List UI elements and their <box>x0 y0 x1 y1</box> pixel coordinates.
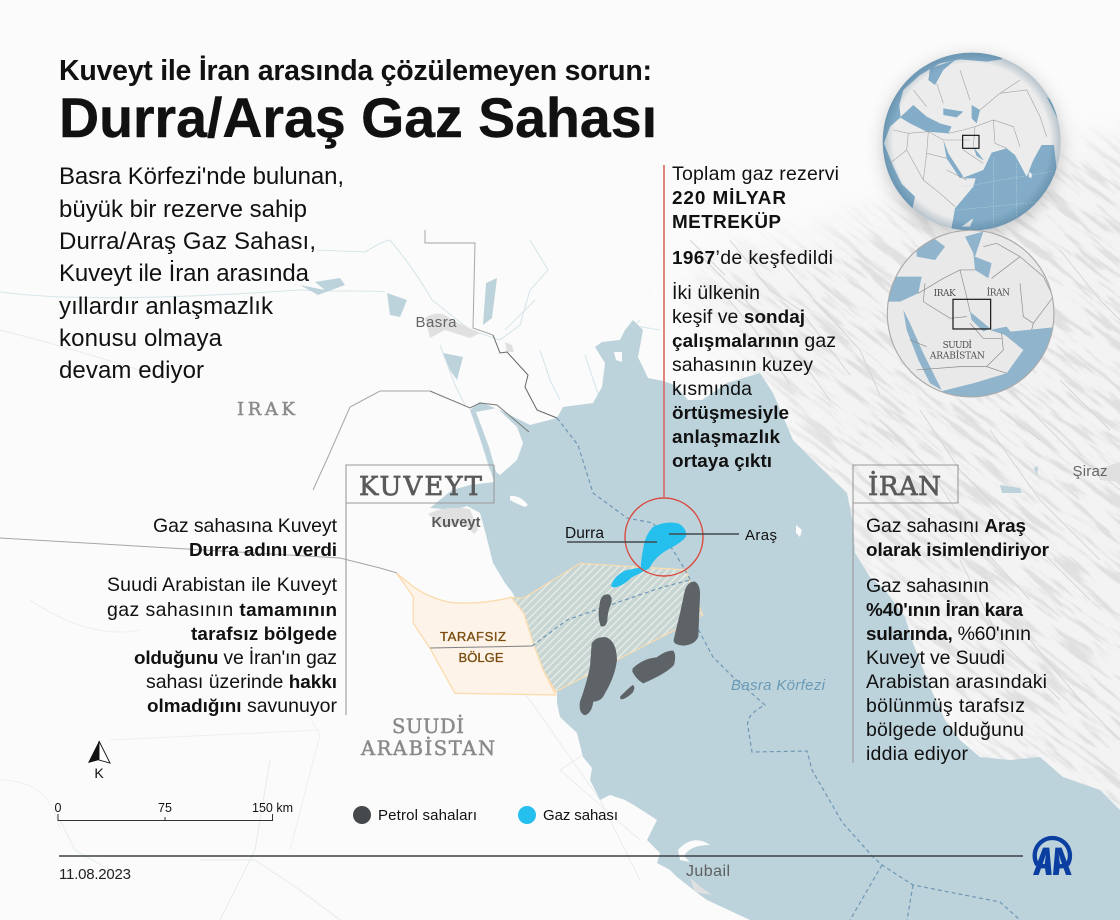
center facts: İki ülkenin <box>672 281 760 304</box>
Kuveyt text: sahası üzerinde hakkı <box>146 671 337 693</box>
title <box>59 55 657 149</box>
map labels: Jubail <box>686 863 730 880</box>
logo: AA <box>1033 838 1072 875</box>
Kuveyt heading box <box>346 465 494 715</box>
Iran heading box <box>853 465 958 763</box>
map labels <box>237 314 1108 880</box>
center facts: keşif ve sondaj <box>672 306 805 328</box>
center facts: ortaya çıktı <box>672 451 772 472</box>
Iran text: Gaz sahasının <box>866 575 989 597</box>
islands <box>510 352 802 862</box>
legend: gas field: Gaz sahası <box>543 807 618 824</box>
icon: north arrow: K <box>94 765 104 781</box>
title: Durra/Araş Gaz Sahası <box>59 87 657 149</box>
map labels: Şiraz <box>1072 463 1108 480</box>
map labels: Araş <box>745 527 777 544</box>
Kuveyt text: olduğunu ve İran'ın gaz <box>134 646 337 669</box>
legend: oil fields: Petrol sahaları <box>378 807 477 824</box>
Iran text: iddia ediyor <box>866 743 968 765</box>
Kuveyt text: Suudi Arabistan ile Kuveyt <box>107 574 338 596</box>
terrain ridges <box>690 240 1120 740</box>
date: 11.08.2023 <box>59 866 131 883</box>
Iran text: bölünmüş tarafsız <box>866 695 1025 717</box>
neutral zone land <box>397 563 703 695</box>
icon: north arrow <box>88 741 110 781</box>
gulf water <box>430 320 1120 920</box>
intro text: yıllardır anlaşmazlık <box>59 293 274 320</box>
urban areas <box>425 313 1120 895</box>
locator globe: region: IRAK <box>934 289 956 299</box>
center facts: METREKÜP <box>672 212 781 233</box>
field leader lines <box>567 534 739 542</box>
terrain texture <box>698 136 1120 806</box>
Iran text: Arabistan arasındaki <box>866 671 1047 693</box>
center facts: Toplam gaz rezervi <box>672 163 839 185</box>
center facts: sahasının kuzey <box>672 354 813 376</box>
borders <box>0 230 557 648</box>
center facts: 220 MİLYAR <box>672 188 786 209</box>
Kuveyt heading box: KUVEYT <box>359 472 483 502</box>
map labels: Basra <box>416 314 457 331</box>
map labels: Basra Körfezi <box>731 677 826 694</box>
Iran text: Kuveyt ve Suudi <box>866 647 1005 669</box>
center facts: 1967’de keşfedildi <box>672 247 833 269</box>
maritime boundaries <box>532 418 1020 920</box>
panel: Iran <box>853 465 1050 765</box>
map labels: Kuveyt <box>432 515 481 531</box>
callout circle and leader <box>625 165 703 576</box>
center facts: örtüşmesiyle <box>672 403 789 424</box>
intro text: devam ediyor <box>59 357 204 384</box>
locator globe: region: SUUDİ <box>943 339 972 351</box>
intro text <box>59 163 344 384</box>
Iran text: bölgede olduğunu <box>866 719 1024 741</box>
locator box: region globe <box>953 299 991 329</box>
center facts: çalışmalarının gaz <box>672 330 836 352</box>
panel: Kuveyt <box>107 465 494 717</box>
Kuveyt text: tarafsız bölgede <box>191 624 337 645</box>
Iran heading box: İRAN <box>868 471 941 502</box>
neutral zone offshore hatch <box>512 563 703 692</box>
oil fields <box>580 582 700 715</box>
lakes <box>300 278 1038 493</box>
Iran text: sularında, %60'ının <box>866 623 1031 645</box>
map labels: BÖLGE <box>458 650 504 665</box>
intro text: Basra Körfezi'nde bulunan, <box>59 163 344 190</box>
intro text: Kuveyt ile İran arasında <box>59 260 310 287</box>
center facts <box>672 163 839 472</box>
title: Kuveyt ile İran arasında çözülemeyen sorun: <box>59 55 652 87</box>
center facts: kısmında <box>672 378 752 400</box>
scale bar: 75 <box>158 801 172 815</box>
scale bar <box>55 801 293 820</box>
Iran text <box>866 515 1050 765</box>
locator globe: region: ARABİSTAN <box>929 349 985 361</box>
map labels: IRAK <box>237 399 296 420</box>
map labels: TARAFSIZ <box>440 629 506 644</box>
map labels: SUUDİ <box>392 714 464 738</box>
gas field <box>611 523 686 587</box>
intro text: konusu olmaya <box>59 325 223 352</box>
Kuveyt text: olmadığını savunuyor <box>147 695 338 717</box>
scale bar: 0 <box>55 801 62 815</box>
Kuveyt text: Gaz sahasına Kuveyt <box>153 515 338 537</box>
intro text: büyük bir rezerve sahip <box>59 196 307 223</box>
oil and gas fields <box>580 523 700 715</box>
center facts: anlaşmazlık <box>672 427 780 448</box>
legend <box>353 806 618 824</box>
locator globe: region: İRAN <box>987 286 1010 298</box>
intro text: Durra/Araş Gaz Sahası, <box>59 228 316 255</box>
island: Bubiyan <box>476 408 523 475</box>
Iran text: %40'ının İran kara <box>866 600 1023 621</box>
globe shadow <box>882 56 1062 236</box>
locator globe: world <box>882 52 1061 230</box>
Kuveyt text <box>107 515 338 717</box>
scale bar: 150 km <box>252 801 293 815</box>
Kuveyt text: gaz sahasının tamamının <box>107 599 337 621</box>
footer rule <box>59 855 1023 857</box>
locator globe: region <box>883 230 1060 403</box>
rivers and faint land lines <box>0 240 660 920</box>
Kuveyt text: Durra adını verdi <box>189 540 337 561</box>
map labels: ARABİSTAN <box>360 736 495 760</box>
Iran text: olarak isimlendiriyor <box>866 540 1050 561</box>
Iran text: Gaz sahasını Araş <box>866 515 1026 537</box>
locator box: world globe <box>963 135 979 148</box>
map labels: Durra <box>565 525 604 542</box>
